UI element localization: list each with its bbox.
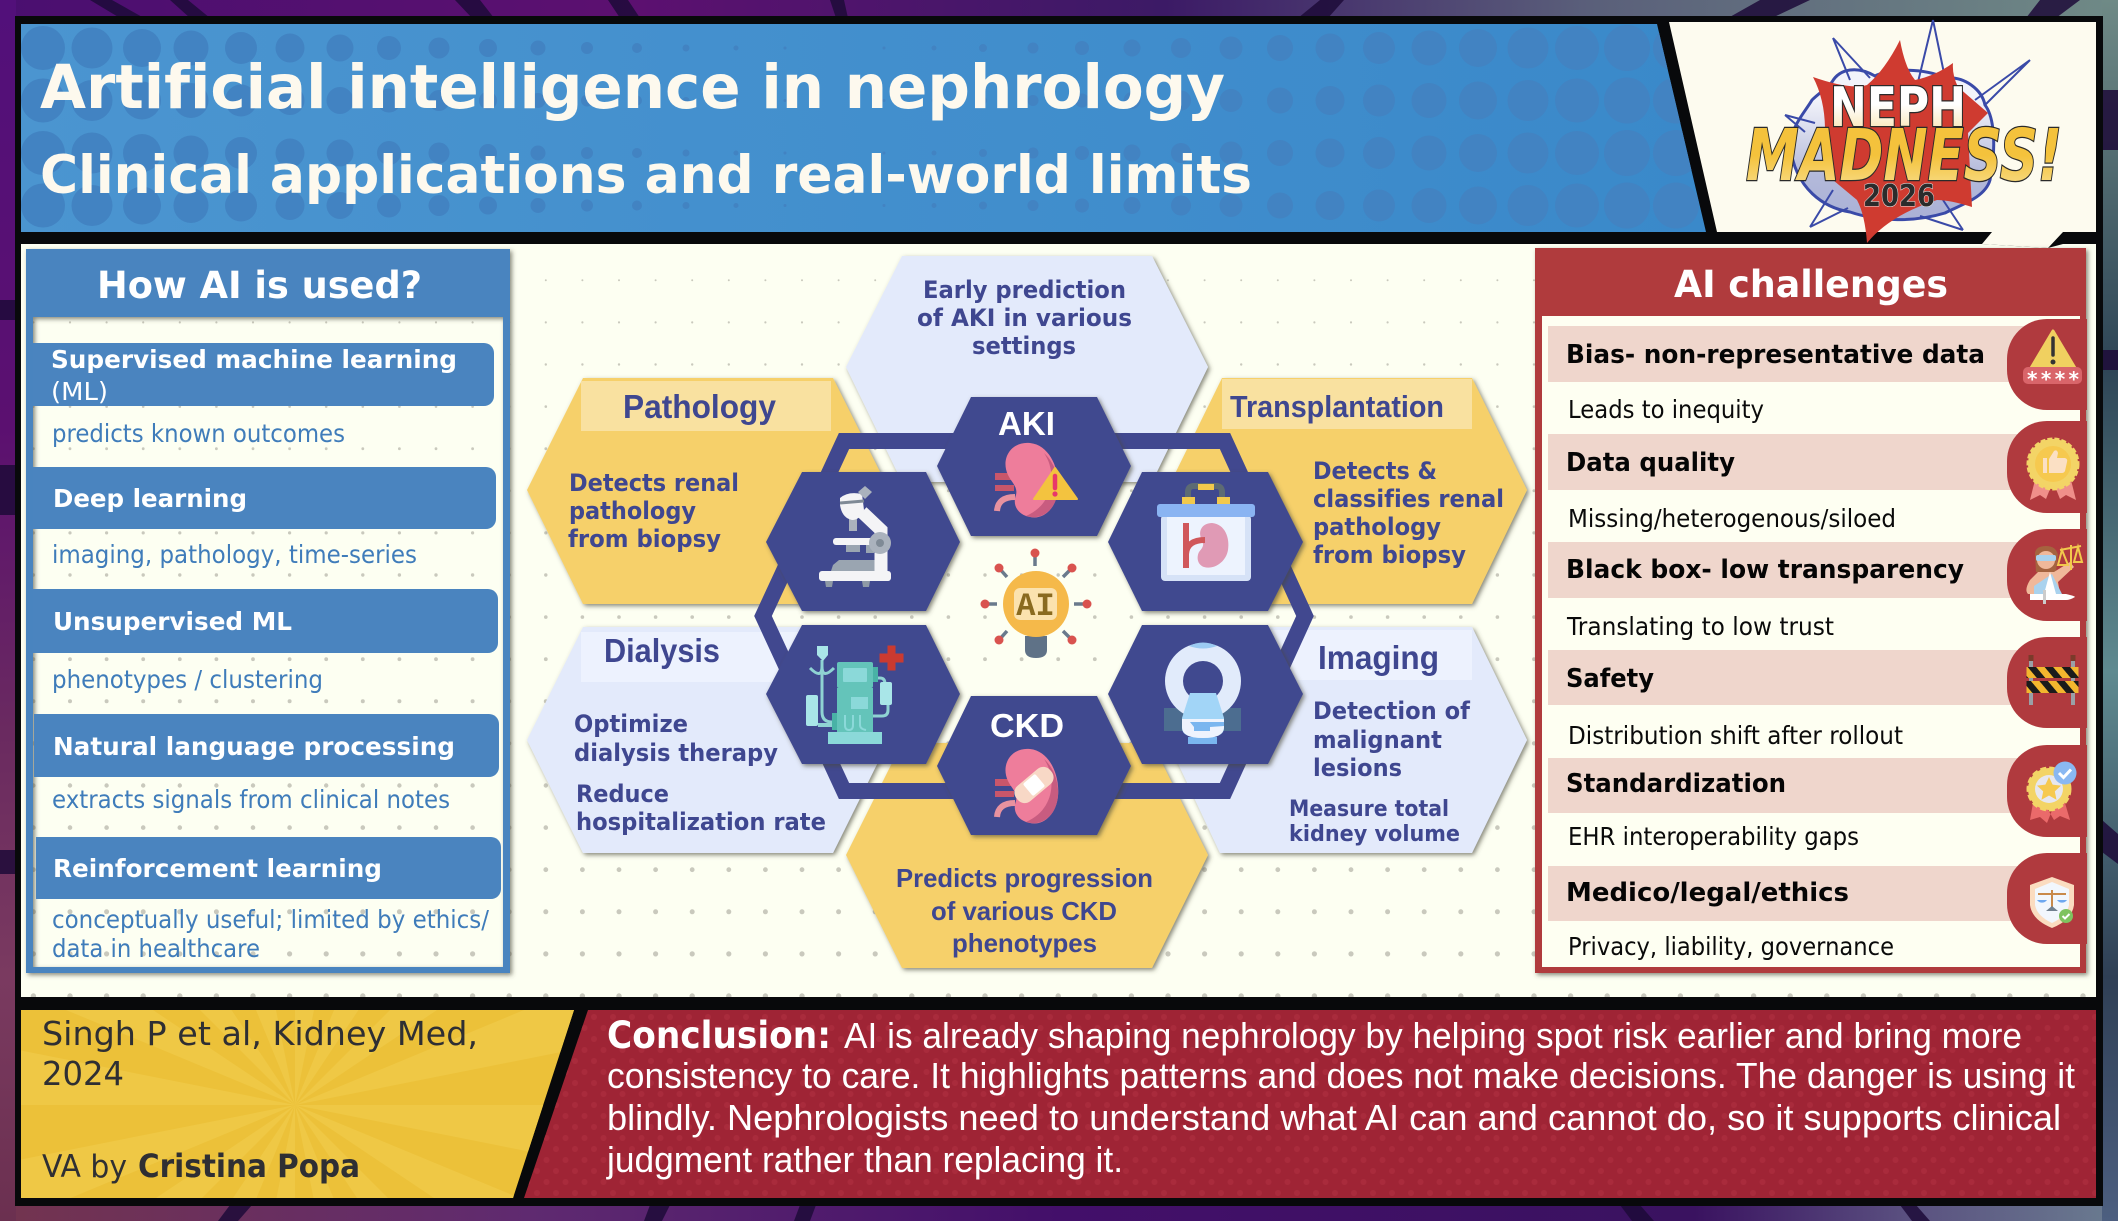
- title: Artificial intelligence in nephrology: [40, 52, 1225, 123]
- challenge: black box: [1548, 542, 2028, 641]
- hexagon: Transplantation: Detects &: [1313, 457, 1437, 485]
- node: AKI: AKI: [998, 405, 1055, 442]
- footer: citation and credit: Singh P et al, Kidney Med,: [42, 1014, 478, 1053]
- item: supervised machine learning: [33, 343, 494, 448]
- logo panel: Neph Madness 2026: 2026: [1863, 179, 1935, 214]
- icon tab: justice figure: [2007, 529, 2087, 621]
- icon: kidney with bandage: [995, 749, 1058, 824]
- footer: citation and credit: 2024: [42, 1054, 124, 1093]
- hexagon: CKD description: [846, 743, 1208, 968]
- hexagon: Dialysis: Reduce: [576, 780, 669, 808]
- challenge: bias: [1548, 326, 2028, 424]
- hexagon: Imaging: lesions: [1313, 754, 1402, 782]
- footer: conclusion: judgment rather than replacing it.: [606, 1139, 1123, 1180]
- hexagon: AKI description: settings: [972, 332, 1076, 360]
- hexagon: Transplantation: pathology: [1313, 513, 1441, 541]
- hexagon: Dialysis: dialysis therapy: [574, 739, 778, 767]
- challenge: standardization: EHR interoperability gaps: [1568, 822, 1859, 851]
- heading: AI challenges: AI challenges: [1674, 263, 1948, 306]
- icon: kidney with warning: [995, 443, 1077, 518]
- hexagon: CKD description: Predicts progression: [896, 863, 1153, 893]
- challenge: safety: Distribution shift after rollout: [1568, 721, 1903, 750]
- footer: conclusion: blindly. Nephrologists need to understand what AI can and cannot do, so it supports clinical: [607, 1097, 2061, 1138]
- item: deep learning: imaging, pathology, time-series: [52, 540, 417, 569]
- item: natural language processing: Natural language processing: [53, 732, 455, 761]
- connecting hexagon ring: [763, 441, 1305, 791]
- footer: conclusion: AI is already shaping nephrology by helping spot risk earlier and bring more: [844, 1015, 2022, 1056]
- challenge: medico legal ethics: Medico/legal/ethics: [1566, 878, 1849, 908]
- footer: conclusion: consistency to care. It highlights patterns and does not make decisions. The danger is using it: [607, 1055, 2075, 1096]
- item: reinforcement learning: [36, 837, 501, 963]
- icon tab: warning: [2007, 319, 2087, 410]
- icon: AI light bulb: AI: [1016, 588, 1055, 625]
- footer: conclusion: [524, 1010, 2096, 1198]
- node: CKD: [937, 696, 1131, 835]
- challenge: data quality: [1548, 434, 2028, 533]
- footer: citation and credit: [21, 1010, 574, 1198]
- item: supervised machine learning: Supervised machine learning: [51, 345, 457, 374]
- title: Clinical applications and real-world limits: [40, 145, 1252, 206]
- challenge: data quality: Data quality: [1566, 448, 1735, 478]
- challenge: medico legal ethics: Privacy, liability, governance: [1568, 932, 1894, 961]
- item: reinforcement learning: conceptually useful; limited by ethics/: [52, 905, 490, 934]
- header banner: [21, 24, 1706, 232]
- icon tab: legal shield: [2007, 853, 2087, 944]
- hexagon: AKI description: Early prediction: [923, 276, 1126, 304]
- item: reinforcement learning: Reinforcement learning: [53, 854, 382, 883]
- challenge: safety: [1548, 650, 2028, 750]
- heading: How AI is used: How AI is used?: [97, 264, 422, 307]
- challenge: data quality: Missing/heterogenous/siloed: [1568, 504, 1896, 533]
- challenge: safety: Safety: [1566, 664, 1654, 694]
- hexagon: CKD description: phenotypes: [952, 928, 1097, 958]
- node: dialysis machine: [766, 625, 960, 764]
- icon: kidney transport box: [1157, 484, 1255, 581]
- hexagon diagram: [527, 256, 1527, 968]
- footer: citation and credit: VA by: [42, 1149, 127, 1185]
- hexagon: Imaging: Measure total: [1289, 797, 1449, 822]
- hexagon: Pathology: Pathology: [623, 388, 777, 425]
- footer: conclusion: Conclusion:: [607, 1014, 831, 1057]
- item: supervised machine learning: predicts known outcomes: [52, 419, 345, 448]
- hexagon: Dialysis: Dialysis: [604, 632, 720, 669]
- hexagon: Imaging: malignant: [1313, 726, 1442, 754]
- item: deep learning: Deep learning: [53, 484, 247, 513]
- icon: CT scanner: [1164, 642, 1241, 744]
- hexagon: Imaging: [1167, 627, 1527, 853]
- hexagon: Transplantation: Transplantation: [1230, 389, 1444, 424]
- hexagon: Pathology: from biopsy: [568, 525, 721, 553]
- icon: AI light bulb: [980, 548, 1092, 658]
- logo panel: Neph Madness 2026: [1669, 20, 2096, 248]
- hexagon: Pathology: Detects renal: [569, 469, 739, 497]
- node: AKI: [937, 397, 1131, 536]
- hexagon: Dialysis: hospitalization rate: [576, 808, 826, 836]
- hexagon: Transplantation: [1167, 378, 1527, 604]
- logo panel: Neph Madness 2026: NEPH: [1830, 76, 1966, 139]
- footer: citation and credit: Cristina Popa: [138, 1147, 360, 1185]
- title: [40, 52, 1252, 206]
- hexagon: AKI description: of AKI in various: [917, 304, 1132, 332]
- item: natural language processing: [34, 714, 499, 814]
- hexagon: Transplantation: from biopsy: [1313, 541, 1466, 569]
- main panel background with halftone dots: [21, 244, 2096, 997]
- icon tab: medal with check: [2007, 745, 2087, 837]
- hexagon: Imaging: Detection of: [1313, 697, 1471, 725]
- icon: dialysis machine: [806, 646, 903, 744]
- item: unsupervised ML: [33, 589, 498, 694]
- hexagon: Imaging: kidney volume: [1289, 822, 1460, 847]
- challenge: black box: Translating to low trust: [1566, 612, 1834, 641]
- panel: AI challenges: [1535, 248, 2087, 973]
- icon: microscope: [819, 486, 891, 587]
- hexagon: Pathology: pathology: [569, 497, 696, 525]
- node: CKD: CKD: [990, 707, 1064, 744]
- node: pathology microscope: [766, 472, 960, 611]
- icon tab: safety barrier: [2007, 637, 2087, 728]
- hexagon: AKI description: [846, 256, 1208, 482]
- node: transplant kit: [1108, 472, 1303, 611]
- item: reinforcement learning: data in healthcare: [52, 934, 260, 963]
- icon tab: badge: [2007, 421, 2087, 513]
- hexagon: CKD description: of various CKD: [931, 896, 1117, 926]
- challenge: black box: Black box- low transparency: [1566, 555, 1964, 585]
- hexagon: Transplantation: classifies renal: [1313, 485, 1504, 513]
- item: natural language processing: extracts signals from clinical notes: [52, 785, 450, 814]
- item: supervised machine learning: (ML): [51, 377, 108, 406]
- icon tab: warning: ****: [2027, 367, 2080, 391]
- item: unsupervised ML: phenotypes / clustering: [52, 665, 323, 694]
- challenge: bias: Bias- non-representative data: [1566, 340, 1985, 370]
- node: imaging scanner: [1108, 625, 1303, 764]
- hexagon: Dialysis: [527, 627, 889, 853]
- item: deep learning: [33, 467, 496, 569]
- hexagon: Pathology: [527, 378, 889, 604]
- hexagon: Imaging: Imaging: [1318, 639, 1439, 676]
- challenge: standardization: Standardization: [1566, 769, 1786, 799]
- item: unsupervised ML: Unsupervised ML: [53, 607, 292, 636]
- panel: How AI is used: [26, 249, 510, 973]
- challenge: medico legal ethics: [1548, 866, 2028, 961]
- hexagon: Dialysis: Optimize: [574, 710, 688, 738]
- challenge: standardization: [1548, 758, 2028, 851]
- challenge: bias: Leads to inequity: [1568, 395, 1764, 424]
